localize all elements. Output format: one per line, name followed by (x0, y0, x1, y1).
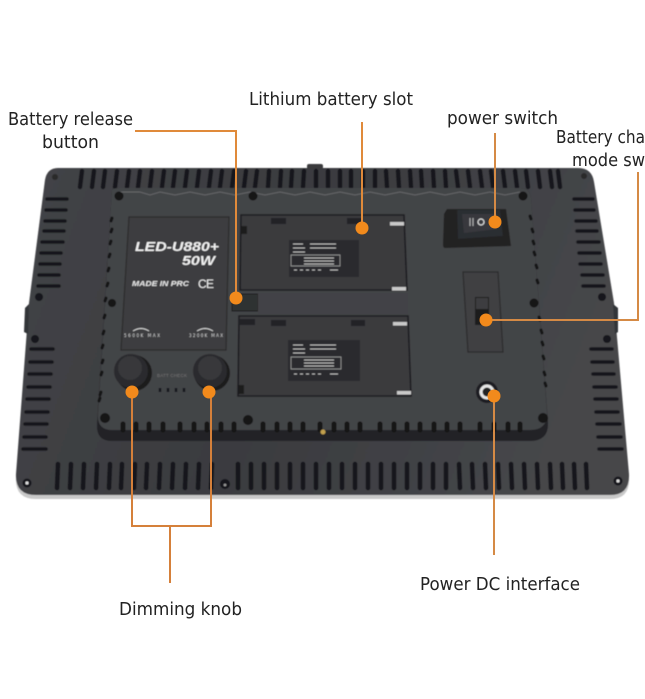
power rocker switch (443, 209, 511, 248)
bottom battery slot (238, 316, 411, 396)
made in prc mark: MADE IN PRC (132, 279, 190, 288)
label: power DC interface: Power DC interface (420, 574, 580, 595)
indicator lights (157, 373, 187, 392)
battery charge mode slide switch (463, 272, 503, 352)
brass mount (320, 430, 326, 434)
leader: lithium battery slot (356, 122, 368, 234)
label: power switch: power switch (447, 108, 558, 129)
inner raised plate (97, 188, 548, 441)
top battery slot (240, 215, 407, 290)
label: dimming knob: Dimming knob (119, 599, 242, 620)
label: battery release button: button (42, 132, 99, 153)
right vent slots (574, 199, 622, 449)
label: battery release button (8, 109, 133, 153)
CE mark: CE (198, 277, 214, 291)
battery release button (232, 293, 408, 314)
leader: power switch (488, 133, 502, 228)
top vent slots (80, 171, 560, 187)
leader: power DC interface (488, 390, 500, 555)
DC power jack (476, 381, 498, 403)
colour temperature scales: 3200K MAX (189, 333, 223, 338)
leader: battery release (135, 131, 242, 304)
panel body (16, 164, 629, 499)
indicator lights: BATT CHECK (157, 373, 187, 378)
battery label (288, 340, 360, 381)
battery label (289, 240, 359, 277)
label: lithium battery slot: Lithium battery slot (249, 89, 413, 110)
left vent slots (23, 199, 67, 449)
bottom vent slots (57, 464, 587, 488)
model nameplate (121, 217, 229, 350)
LED panel back (16, 164, 629, 499)
wattage: 50W (182, 254, 217, 268)
corner and edge screws (22, 173, 622, 489)
plate edge notches and screws (99, 216, 546, 401)
dimming knobs (114, 354, 230, 391)
leader: dimming knobs (126, 386, 216, 583)
colour temperature scales (124, 333, 223, 338)
colour temperature scales: 5600K MAX (124, 333, 160, 338)
label: battery release button: Battery release (8, 109, 133, 130)
model name: LED-U880+ (135, 240, 220, 254)
label: battery charge mode switch (cropped) (556, 127, 645, 171)
leader: battery charge mode switch (480, 172, 638, 326)
